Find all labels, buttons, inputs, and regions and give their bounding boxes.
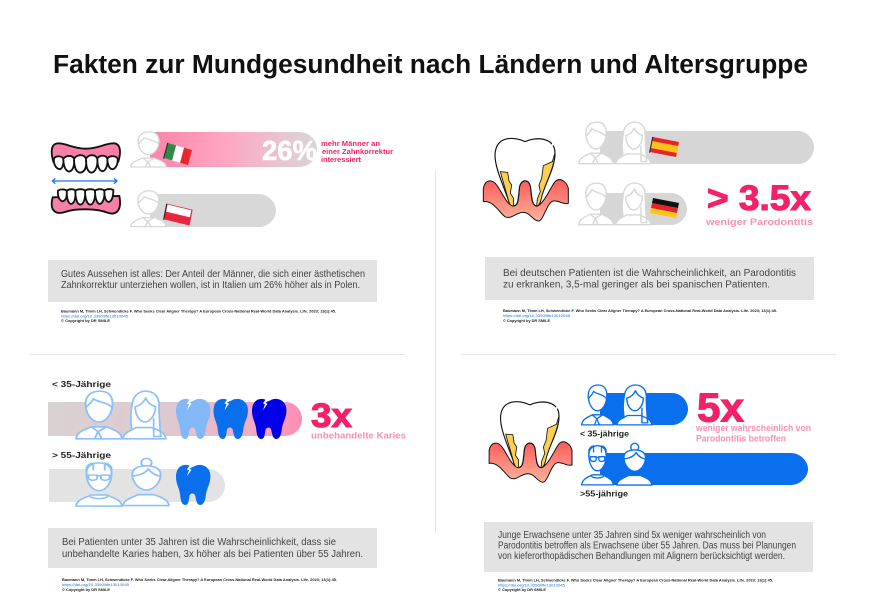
bar: über 55: [49, 469, 225, 502]
citation: Italien: https://doi.org/10.3390/life13010045: [61, 314, 128, 318]
citation: Parodontitis: © Copyright by DR SMILE: [498, 587, 546, 592]
label: weniger wahrscheinlich: [695, 422, 811, 444]
flag: Polen: [163, 204, 192, 226]
bar: Deutschland: [600, 193, 687, 225]
value: 26%: 26%: [262, 135, 317, 166]
icon: man Italy: [131, 132, 166, 167]
value: 5x: 5x: [697, 384, 744, 430]
icon: old man blue: [582, 446, 613, 485]
panel: Italien und Polen: [48, 132, 393, 323]
callout: mehr Männer: [321, 141, 393, 164]
icon: tooth with periodontitis young: [489, 402, 572, 482]
value: 3x: 3x: [311, 397, 352, 435]
icon: man Germany: [579, 183, 613, 225]
text box: Parodontitis: von kieferorthopädischen Behandlungen mit Alignern berücksichtigt werden.: [498, 551, 785, 562]
icon: dentures with arrow: [52, 143, 120, 214]
icon: man Spain: [579, 122, 613, 164]
icon: tooth light blue: [176, 399, 210, 439]
text box: Deutschland: Bei deutschen Patienten ist die Wahrscheinlichkeit, an Parodontitis: [503, 268, 796, 279]
citation: Deutschland: https://doi.org/10.3390/life13010045: [503, 313, 570, 318]
text box: Karies: [48, 528, 377, 568]
bar: unter 35: [48, 402, 302, 436]
callout: mehr Männer: mehr Männer an: [321, 141, 380, 148]
label: 35-jährige: < 35-jährige: [580, 430, 629, 438]
label: weniger wahrscheinlich: weniger wahrscheinlich von: [695, 422, 811, 433]
citation: Karies: https://doi.org/10.3390/life13010045: [62, 582, 129, 587]
callout: mehr Männer: einer Zahnkorrektur: [322, 149, 393, 156]
bar: Italien: [150, 132, 317, 167]
citation: Parodontitis: [498, 578, 773, 592]
text box: Karies: Bei Patienten unter 35 Jahren ist die Wahrscheinlichkeit, dass sie: [62, 537, 336, 548]
flag: Italien: [163, 143, 192, 166]
panel: Karies nach Alter: [48, 380, 406, 592]
label: über 55: > 55-Jährige: [52, 451, 112, 460]
text box: Deutschland: [485, 257, 814, 300]
bar: unter 35 blue: [600, 393, 688, 425]
text box: Italien: Gutes Aussehen ist alles: Der Anteil der Männer, die sich einer ästhetischen: [61, 269, 365, 280]
flag: Deutschland: [650, 198, 679, 218]
value: 3.5x: > 3.5x: [707, 179, 812, 218]
bar: über 55 blue: [600, 453, 808, 485]
label: weniger Parodontitis: weniger Parodontitis: [705, 216, 813, 227]
citation: Parodontitis: Baumann M, Timm LH, Schwendicke F. Who Seeks Clear Aligner Therapy? A European Cross-National Real-World Data Analysis. Life. 2023; 13(1):45.: [498, 578, 773, 582]
text box: Italien: [48, 260, 377, 302]
icon: young woman blue: [617, 385, 652, 425]
label: unbehandelte Karies: unbehandelte Karies: [311, 430, 406, 440]
label: weniger wahrscheinlich: Parodontitis betroffen: [696, 432, 786, 444]
citation: Karies: © Copyright by DR SMILE: [62, 587, 110, 592]
panel: Parodontitis nach Alter: [484, 384, 813, 592]
icon: woman Germany: [616, 183, 651, 225]
text box: Parodontitis: [484, 522, 813, 572]
icon: tooth with periodontitis: [483, 138, 568, 221]
citation: Karies: Baumann M, Timm LH, Schwendicke F. Who Seeks Clear Aligner Therapy? A European Cross-National Real-World Data Analysis. Life. 2023; 13(1):45.: [62, 577, 337, 582]
citation: Italien: © Copyright by DR SMILE: [61, 318, 110, 323]
icon: young man: [76, 391, 122, 439]
icon: tooth blue: [214, 399, 248, 439]
icon: young woman: [123, 391, 166, 439]
text box: Deutschland: zu erkranken, 3,5-mal geringer als bei spanischen Patienten.: [503, 280, 770, 290]
icon: man Poland: [131, 191, 166, 227]
icon: woman Spain: [616, 122, 651, 164]
icon: old woman: [123, 458, 169, 506]
citation: Italien: [61, 308, 336, 323]
citation: Deutschland: [503, 308, 777, 323]
icon: young man blue: [582, 385, 613, 425]
citation: Parodontitis: https://doi.org/10.3390/life13010045: [498, 582, 565, 588]
icon: tooth blue older: [176, 465, 210, 505]
citation: Deutschland: Baumann M, Timm LH, Schwendicke F. Who Seeks Clear Aligner Therapy? A European Cross-National Real-World Data Analysis. Life. 2023; 13(1):45.: [503, 308, 777, 313]
icon: tooth dark blue: [252, 399, 286, 439]
text box: Italien: Zahnkorrektur unterziehen wollen, ist in Italien um 26% höher als in Polen.: [61, 280, 360, 291]
citation: Deutschland: © Copyright by DR SMILE: [503, 318, 550, 323]
title: Fakten zur Mundgesundheit nach Ländern und Altersgruppe: [53, 51, 808, 79]
callout: mehr Männer: interessiert: [321, 157, 362, 164]
icon: old man: [76, 463, 122, 506]
bar: Polen: [150, 194, 276, 227]
citation: Italien: Baumann M, Timm LH, Schwendicke F. Who Seeks Clear Aligner Therapy? A European Cross-National Real-World Data Analysis. Life. 2023; 13(1):45.: [61, 308, 336, 314]
text box: Karies: unbehandelte Karies haben, 3x höher als bei Patienten über 55 Jahren.: [62, 549, 363, 560]
panel: Spanien und Deutschland: [483, 122, 814, 323]
text box: Parodontitis: Parodontitis betroffen als Erwachsene über 55 Jahren. Das muss bei Planungen: [498, 540, 796, 552]
label: unter 35: < 35-Jährige: [52, 380, 112, 389]
text box: Parodontitis: Junge Erwachsene unter 35 Jahren sind 5x weniger wahrscheinlich von: [498, 530, 766, 541]
flag: Spanien: [649, 137, 679, 158]
bar: Spanien: [600, 131, 814, 164]
label: 55-jährige: >55-jährige: [580, 490, 628, 498]
icon: old woman blue: [617, 443, 652, 485]
citation: Karies: [62, 577, 337, 592]
